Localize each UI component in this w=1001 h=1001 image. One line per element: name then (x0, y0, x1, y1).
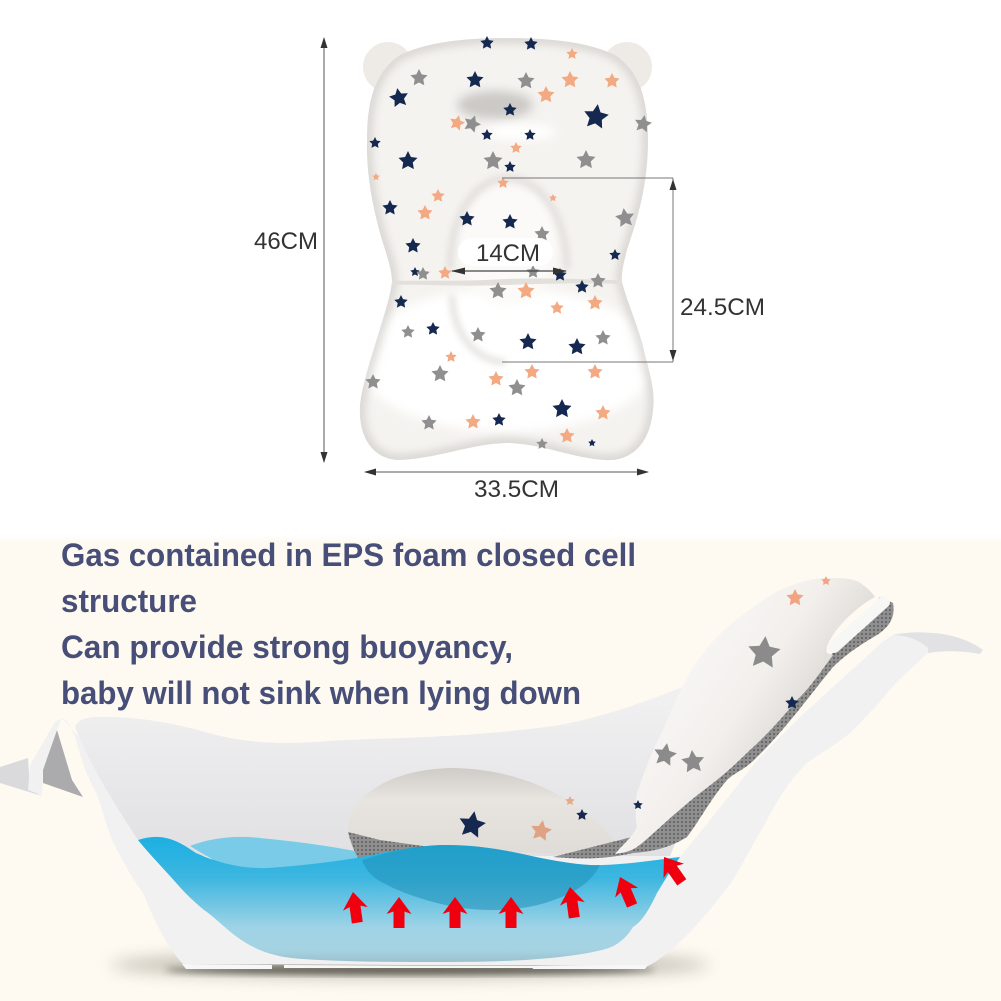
reclined cushion folded ear (834, 602, 884, 647)
icon: left ear (363, 42, 413, 92)
left tub fin (28, 718, 62, 795)
heading text block: Gas contained in EPS foam closed cell (61, 537, 636, 573)
dimension: 33.5CM width (364, 468, 649, 503)
dimension: 46CM height: 46CM (254, 228, 318, 255)
dimension: 24.5CM seat length (502, 178, 765, 362)
left tub grey underside (43, 730, 83, 797)
cushion stars (457, 796, 588, 842)
ground shadow wide (110, 952, 710, 978)
tub feet (182, 964, 648, 969)
front water (138, 837, 680, 962)
tub interior (75, 684, 702, 856)
right tub handle (893, 632, 983, 654)
arrow 4 (498, 897, 524, 928)
cushion shading (357, 38, 657, 460)
orange stars (372, 48, 620, 442)
dimension: 33.5CM width: 33.5CM (474, 476, 559, 503)
dimension: 24.5CM seat length: 24.5CM (680, 294, 765, 321)
background fade band (0, 535, 1001, 542)
red buoyancy arrows (341, 850, 692, 928)
dimension: 14CM seat width (451, 238, 567, 274)
heading text block: structure (61, 583, 197, 619)
arrow 7 (654, 850, 692, 890)
floating cushion (348, 768, 615, 858)
arrow 2 (386, 897, 412, 928)
navy stars (369, 36, 621, 446)
icon: right ear (602, 42, 652, 92)
arrow 6 (608, 872, 644, 910)
heading text block: Can provide strong buoyancy, (61, 629, 513, 665)
submerged cushion (362, 845, 600, 910)
cushion body (360, 38, 654, 460)
top background (0, 0, 1001, 537)
dimension: 46CM height (254, 37, 328, 463)
arrow 5 (558, 885, 587, 919)
dimension: 14CM seat width: 14CM (476, 240, 540, 267)
grey stars (365, 69, 653, 449)
reclined cushion mesh back (553, 597, 894, 858)
arrow 3 (442, 897, 468, 928)
arrow 1 (341, 890, 370, 924)
cushion mesh (348, 832, 430, 862)
tub outer shell (62, 635, 928, 966)
ground shadow dark (165, 965, 655, 975)
bottom cream background (0, 542, 1001, 1001)
heading text block (61, 537, 636, 711)
heading text block: baby will not sink when lying down (61, 675, 581, 711)
left tub handle tail (0, 758, 42, 796)
product top view: star cushion (357, 36, 657, 460)
back water (190, 837, 360, 870)
reclined cushion stars (633, 576, 831, 809)
reclined cushion (615, 578, 875, 854)
cross-section illustration: bathtub (0, 576, 983, 978)
